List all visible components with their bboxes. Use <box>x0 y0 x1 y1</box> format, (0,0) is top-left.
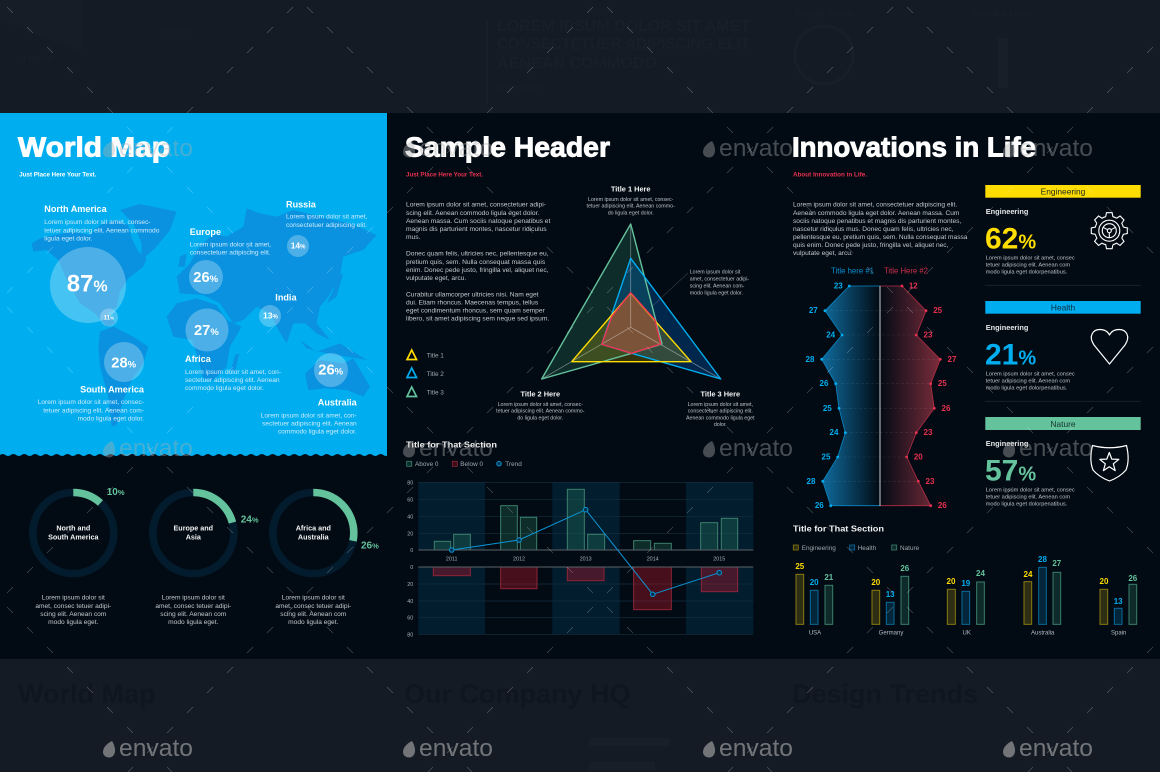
donut: north and south america: scing elit. Aenean com <box>40 611 107 618</box>
donut: europe and asia: Asia <box>186 533 202 542</box>
text: russia <box>286 199 368 229</box>
card: health: modo ligula eget dolorpenatibus. <box>986 386 1068 392</box>
ghost preview strip: bottom: World Map <box>18 679 156 709</box>
text: south america: tetuer adipiscing elit. Aenean com- <box>43 407 144 414</box>
mirror chart: 25 <box>822 452 831 462</box>
trend line <box>449 507 722 597</box>
bar chart legend: Engineering <box>802 545 836 552</box>
mirror chart: 23 <box>834 282 843 290</box>
subtitle: Just Place Here Your Text. <box>19 172 97 179</box>
label: title 1: Title 1 Here <box>611 185 651 194</box>
icon: heart <box>1091 330 1128 364</box>
bubble: europe: 26% <box>193 270 219 286</box>
label: title 3: consectetuer adipiscing elit. <box>688 409 753 415</box>
leader line <box>652 273 688 307</box>
text block <box>793 202 968 257</box>
bar chart: countries: 20 <box>810 578 819 587</box>
mirror chart: 27 <box>809 306 818 315</box>
text block: sociis natoque penatibus et magnis dis parturient montes, <box>793 218 961 225</box>
text: australia: sectetuer adipiscing elit. Aenean <box>262 420 357 427</box>
text: russia: consectetuer adipiscing elit. <box>286 222 367 229</box>
axis values: 40 <box>407 599 413 605</box>
axis values: 0 <box>410 548 413 554</box>
panel: donut charts <box>33 487 379 626</box>
ghost preview strip: bottom: Our Company HQ <box>404 679 631 709</box>
text: north america <box>44 204 160 242</box>
ghost preview strip: bottom: Design Trends <box>792 679 978 709</box>
bubble: russia <box>287 235 309 257</box>
watermark: envato logos: envato <box>119 735 193 762</box>
ghost preview strip: bottom <box>18 679 978 770</box>
label: title 2: tetuer adipiscing elit. Aenean commo- <box>496 409 585 415</box>
text: north america: Lorem ipsum dolor sit amet, consec- <box>44 219 151 226</box>
text block: intro: Aenean massa. Cum sociis natoque penatibus et <box>406 218 550 225</box>
bar chart: countries: 19 <box>961 579 971 588</box>
card: engineering: Engineering <box>986 207 1029 216</box>
title: world map: World Map <box>18 132 170 162</box>
mirror chart: 24 <box>826 330 836 340</box>
text block: pellentesque eu, pretium quis, sem. Nulla consequat massa <box>793 234 968 241</box>
panel: innovations in life <box>792 132 1141 636</box>
year labels: 2015 <box>713 556 725 562</box>
text block: intro: vulputate eget, arcu. <box>406 275 466 282</box>
bar chart: countries: Germany <box>879 630 903 636</box>
bar chart: countries: 20 <box>871 578 881 587</box>
text: australia: Lorem ipsum dolor sit amet, con- <box>261 412 357 419</box>
bar chart: countries: 24 <box>1024 570 1033 579</box>
donut: europe and asia: scing elit. Aenean com <box>160 611 227 618</box>
bar chart: countries: Spain <box>1111 630 1126 636</box>
mirror chart: 25 <box>823 404 832 413</box>
callout text: modo ligula eget dolor. <box>690 290 743 296</box>
donut: north and south america: Lorem ipsum dolor sit <box>42 595 105 602</box>
card: nature <box>985 417 1141 508</box>
donut: africa and australia: modo ligula eget. <box>288 619 339 626</box>
ghost preview strip: top: Triangle Charts <box>794 9 853 18</box>
bar chart legend: Nature <box>900 545 920 552</box>
text: australia: commodo ligula eget dolor. <box>278 428 357 435</box>
card: engineering: modo ligula eget dolorpenatibus. <box>986 270 1068 276</box>
panel: world map <box>0 113 387 458</box>
callout text: amet, consectetuer adipi- <box>690 276 749 282</box>
ghost preview strip: top: CONSECTETUER ADIPISCING ELIT <box>497 36 750 53</box>
donut: europe and asia: Europe and <box>174 523 213 532</box>
donut: africa and australia: amet, consec tetuer adipi- <box>275 603 351 610</box>
text block: intro: libero, sit amet adipiscing sem neque sed ipsum. <box>406 316 549 323</box>
map silhouette <box>32 204 377 427</box>
axis values: 20 <box>407 531 413 537</box>
main dark band <box>0 113 1160 659</box>
mirror chart: 26 <box>942 404 951 413</box>
card: nature: Lorem ipsum dolor sit amet, consec <box>986 488 1075 494</box>
text block: intro: Curabitur ullamcorper ultricies nisi. Nam eget <box>406 291 539 298</box>
bubble: russia: 14% <box>291 241 306 251</box>
card: health: Lorem ipsum dolor sit amet, consec <box>986 372 1075 378</box>
bubble: north america <box>50 247 126 323</box>
text: africa: Lorem ipsum dolor sit amet, con- <box>185 369 281 376</box>
donut: north and south america: 10% <box>107 487 125 498</box>
card: engineering: tetuer adipiscing elit. Aenean com <box>986 263 1070 269</box>
callout text <box>690 269 749 296</box>
bar chart: countries: 26 <box>1128 574 1138 583</box>
text: australia: Australia <box>318 398 358 408</box>
bars above zero <box>434 489 738 550</box>
bar chart: countries: USA <box>809 630 821 636</box>
mirror chart: 26 <box>820 379 829 388</box>
text: australia <box>261 398 358 435</box>
bubble: south america: 28% <box>111 355 137 371</box>
bar chart: countries <box>795 555 1138 636</box>
text block: intro: magnis dis parturient montes, nascetur ridiculus <box>406 226 547 233</box>
text block: Aenean commodo ligula eget dolor. Aenean massa. Cum <box>793 210 960 217</box>
year labels: 2012 <box>513 556 525 562</box>
bubble: north america: 87% <box>67 271 108 298</box>
mirror chart: Title Here #2 <box>884 266 928 275</box>
ghost preview strip: top <box>0 0 1030 104</box>
bar chart: countries: 24 <box>976 569 985 578</box>
text: north america: ligula eget dolor. <box>44 235 92 242</box>
axis values: 40 <box>407 514 413 520</box>
card: engineering: 62% <box>985 222 1036 255</box>
callout text: Lorem ipsum dolor sit <box>690 269 741 275</box>
mirror chart: 12 <box>909 282 918 290</box>
ghost preview strip: top: LOREM IPSUM DOLOR SIT AMET <box>497 18 750 35</box>
axis values: 60 <box>407 616 413 622</box>
text: russia: Russia <box>286 199 317 209</box>
mirror chart: 24 <box>830 428 839 437</box>
text block: intro: Lorem ipsum dolor sit amet, consectetuer adipi- <box>406 202 546 209</box>
callout text: scing elit. Aenean com- <box>690 283 745 289</box>
text block: intro: mus. <box>406 234 421 241</box>
card: health: 21% <box>985 338 1036 371</box>
divider <box>985 285 1141 401</box>
mirror chart <box>806 266 957 510</box>
watermark: envato logos: envato <box>419 135 493 162</box>
icon: shield with star <box>1091 446 1128 481</box>
mirror chart: 27 <box>948 355 957 364</box>
column chart legend: Above 0 <box>415 461 439 468</box>
label: title 3: Lorem ipsum dolor sit amet, <box>688 402 753 408</box>
mirror chart: Title here #1 <box>831 266 874 275</box>
card: health <box>985 301 1141 392</box>
mirror chart: 23 <box>924 428 933 437</box>
radar legend <box>407 350 444 396</box>
year labels: 2011 <box>446 556 457 562</box>
radar legend: Title 2 <box>427 371 444 378</box>
mirror chart: 25 <box>933 306 943 315</box>
bubble: india: 13% <box>263 311 278 321</box>
text block: intro: scing elit. Aenean commodo ligula eget dolor. <box>406 210 539 217</box>
bubble: australia: 26% <box>318 362 344 378</box>
text: africa: commodo ligula eget dolor. <box>185 385 264 392</box>
watermark: envato logos: envato <box>1019 735 1093 762</box>
donut: europe and asia: modo ligula eget. <box>168 619 219 626</box>
card: health: Engineering <box>986 323 1029 332</box>
bar chart: countries: 20 <box>1100 577 1109 586</box>
mirror chart: 28 <box>807 477 816 486</box>
watermark: envato logos: envato <box>419 735 493 762</box>
label: title 3: dolor. <box>714 422 727 428</box>
text: africa: sectetuer adipiscing elit. Aenean <box>185 377 280 384</box>
axis values: 60 <box>407 497 413 503</box>
label: title 1: do ligula eget dolor. <box>608 210 654 216</box>
text: north america: North America <box>44 204 108 214</box>
label: title 2 <box>496 390 585 421</box>
text block: quis enim. Donec pede justo, fringilla vel, aliquet nec, <box>793 242 949 249</box>
donut: europe and asia <box>153 492 259 626</box>
card: health: Health <box>1051 303 1075 313</box>
donut: africa and australia: Africa and <box>296 523 331 532</box>
text: north america: tetuer adipiscing elit. Aenean commodo <box>44 227 160 234</box>
mirror chart: 28 <box>806 355 815 364</box>
card: engineering: Lorem ipsum dolor sit amet, consec <box>986 256 1075 262</box>
card: health: tetuer adipiscing elit. Aenean com <box>986 379 1070 385</box>
watermark: envato logos: envato <box>119 435 193 462</box>
text block: intro <box>406 202 550 323</box>
bubble: central america <box>100 308 118 326</box>
text: south america <box>38 385 145 422</box>
title: innovations in life: Innovations in Life <box>792 132 1036 162</box>
bar chart legend <box>793 545 920 552</box>
bar chart: countries: Australia <box>1031 630 1055 636</box>
bar chart: countries: 20 <box>947 577 956 586</box>
radar chart <box>542 224 721 379</box>
ghost preview strip: top: AENEAN COMMODO <box>497 55 657 72</box>
subtitle: Just Place Here Your Text. <box>406 172 483 179</box>
label: title 1: tetuer adipiscing elit. Aenean commo- <box>587 204 675 210</box>
year labels: 2014 <box>647 556 659 562</box>
text block: nascetur ridiculus mus. Donec quam felis, ultricies nec, <box>793 226 954 233</box>
bar chart: countries: 21 <box>824 573 834 582</box>
text: africa <box>185 354 281 392</box>
axis values: 0 <box>410 565 413 571</box>
card: nature: Nature <box>1050 419 1076 429</box>
text: europe <box>190 227 271 256</box>
section heading: Title for That Section <box>793 524 884 534</box>
donut: north and south america: modo ligula eget. <box>48 619 99 626</box>
bubble: africa <box>186 308 228 352</box>
column chart legend: Trend <box>505 461 522 468</box>
bubble: central america: 11% <box>104 316 114 322</box>
bar chart: countries: 27 <box>1052 559 1062 568</box>
card: nature: tetuer adipiscing elit. Aenean com <box>986 495 1070 501</box>
text: south america: modo ligula eget dolor. <box>78 415 144 422</box>
card: engineering: Engineering <box>1041 187 1086 197</box>
text: russia: Lorem ipsum dolor sit amet, <box>286 214 368 221</box>
column chart legend: Below 0 <box>460 461 483 468</box>
text: south america: Lorem ipsum dolor sit amet, consec- <box>38 399 144 406</box>
label: title 3 <box>686 390 755 428</box>
bar chart: countries: 13 <box>1114 597 1123 606</box>
text: europe: Lorem ipsum dolor sit amet, <box>190 241 271 248</box>
bar chart: countries: 28 <box>1038 555 1047 564</box>
watermark: envato logos: envato <box>1019 435 1093 462</box>
label: title 3: Title 3 Here <box>700 390 740 399</box>
card: nature: 57% <box>985 454 1036 487</box>
bar chart legend: Health <box>858 545 877 552</box>
axis values <box>407 480 413 638</box>
donut: africa and australia <box>273 492 379 626</box>
watermark: envato logos: envato <box>719 135 793 162</box>
text block: Lorem ipsum dolor sit amet, consectetuer adipiscing elit. <box>793 202 957 209</box>
mirror chart: 23 <box>924 330 933 340</box>
bar chart: countries: 25 <box>795 562 805 571</box>
label: title 2: Title 2 Here <box>520 390 560 399</box>
text block: vulputate eget, arcu. <box>793 250 853 257</box>
bubble: australia <box>314 353 348 387</box>
donut: north and south america <box>33 487 125 626</box>
bubble: europe <box>189 260 223 294</box>
donut: africa and australia: 26% <box>361 541 379 552</box>
watermark: envato logos <box>103 135 1093 762</box>
label: title 3: Aenean commodo ligula eget <box>686 415 755 421</box>
mirror chart: 25 <box>938 379 947 388</box>
label: title 1 <box>587 185 675 216</box>
donut: europe and asia: Lorem ipsum dolor sit <box>162 595 225 602</box>
axis values: 20 <box>407 582 413 588</box>
bar chart: countries: 13 <box>886 590 895 599</box>
title: sample header: Sample Header <box>405 132 610 162</box>
label: title 1: Lorem ipsum dolor sit amet, consec- <box>588 197 674 203</box>
icon: gear <box>1091 213 1127 249</box>
bubble: africa: 27% <box>194 323 219 339</box>
mirror chart: 26 <box>815 501 824 510</box>
card: nature: Engineering <box>986 439 1029 448</box>
bars below zero <box>433 567 738 610</box>
label: title 2: Lorem ipsum dolor sit amet, consec- <box>498 402 583 408</box>
bar chart: countries: UK <box>963 630 971 636</box>
year labels: 2013 <box>580 556 592 562</box>
watermark: envato logos: envato <box>419 435 493 462</box>
axis values: 80 <box>407 632 413 638</box>
watermark: envato logos: envato <box>719 435 793 462</box>
subtitle: About Innovation in Life. <box>793 172 867 179</box>
ghost preview strip: top: Rounded Chart <box>972 9 1030 18</box>
text: south america: South America <box>80 385 145 395</box>
year labels <box>446 556 725 562</box>
mirror chart: 20 <box>914 452 923 462</box>
donut: north and south america: North and <box>56 523 90 532</box>
card: engineering <box>985 185 1141 276</box>
donut: north and south america: amet, consec tetuer adipi- <box>35 603 111 610</box>
section heading: Title for That Section <box>406 439 497 449</box>
mirror chart: 26 <box>938 501 947 510</box>
ghost preview strip: top: 4 500 230 <box>22 56 53 63</box>
text: africa: Africa <box>185 354 212 364</box>
chart background <box>418 482 753 634</box>
radar legend: Title 3 <box>427 390 444 396</box>
text: india: India <box>275 293 297 303</box>
watermark: envato logos: envato <box>1019 135 1093 162</box>
text block: intro: Donec quam felis, ultricies nec, pellentesque eu, <box>406 251 549 258</box>
bar chart: countries: 26 <box>900 564 910 573</box>
donut: europe and asia: amet, consec tetuer adipi- <box>155 603 231 610</box>
watermark: envato logos: envato <box>719 735 793 762</box>
text block: intro: eget condimentum rhoncus, sem quam semper <box>406 308 546 314</box>
ghost preview strip: top: 4 500 230 <box>160 28 191 35</box>
label: title 2: do ligula eget dolor. <box>517 415 563 421</box>
text block: intro: pretium quis, sem. Nulla consequat massa quis <box>406 259 546 266</box>
radar legend: Title 1 <box>427 352 444 360</box>
axis values: 80 <box>407 480 413 486</box>
mirror chart: 23 <box>926 477 935 486</box>
ghost preview strip: top: Lorem ipsum <box>497 84 541 91</box>
bubble: south america <box>104 342 144 382</box>
text block: intro: enim. Donec pede justo, fringilla vel, aliquet nec, <box>406 267 549 274</box>
bubble: india <box>259 305 281 327</box>
donut: europe and asia: 24% <box>241 515 259 526</box>
watermark: envato logos: envato <box>119 135 193 162</box>
donut: africa and australia: scing elit. Aenean com <box>280 611 347 618</box>
text: europe: consectetuer adipiscing elit. <box>190 249 271 256</box>
donut: africa and australia: Australia <box>298 533 330 542</box>
text: europe: Europe <box>190 227 221 237</box>
donut: north and south america: South America <box>48 533 100 542</box>
column chart legend <box>407 461 522 468</box>
column chart <box>407 480 753 638</box>
text block: intro: dui. Etiam rhoncus. Maecenas tempus, tellus <box>406 299 539 306</box>
panel: sample header <box>405 132 755 638</box>
donut: africa and australia: Lorem ipsum dolor sit <box>282 595 345 602</box>
card: nature: modo ligula eget dolorpenatibus. <box>986 502 1068 508</box>
